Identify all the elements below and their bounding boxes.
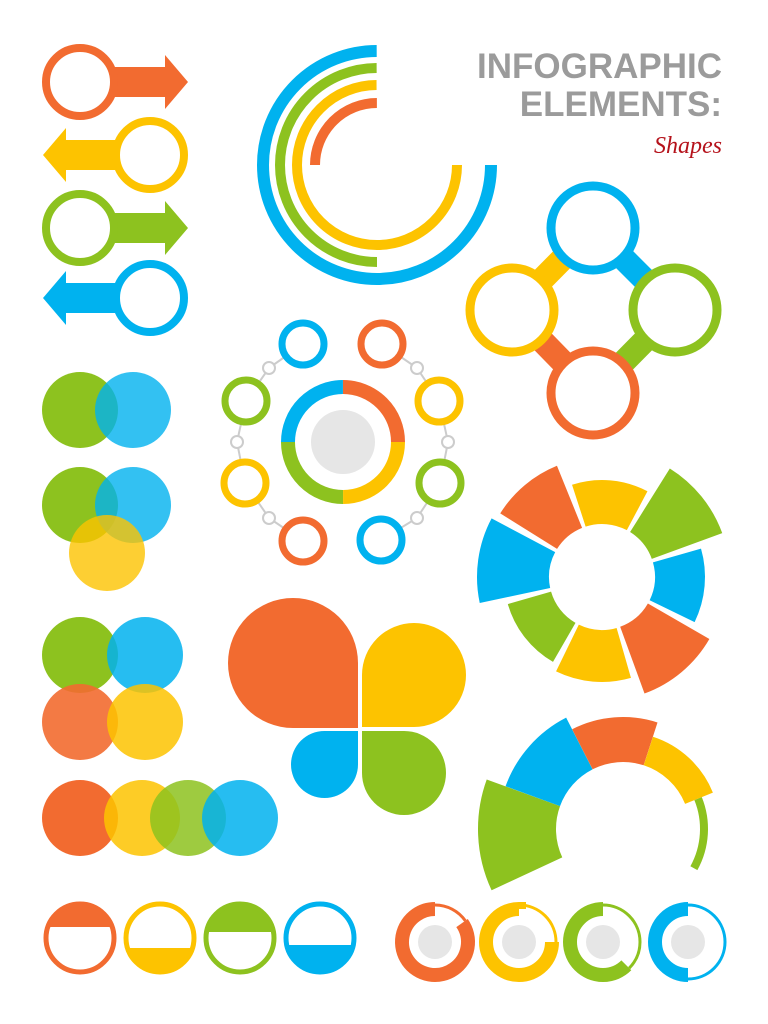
title xyxy=(477,47,722,159)
arrow: orange right xyxy=(46,48,188,116)
arrow: blue left xyxy=(43,264,184,332)
half-filled circles xyxy=(46,904,354,972)
ring cluster xyxy=(224,323,461,562)
title: Shapes xyxy=(654,133,722,159)
arrow: yellow left xyxy=(43,121,184,189)
concentric arcs xyxy=(263,51,491,279)
arrow circles xyxy=(43,48,188,332)
arrow: green right xyxy=(46,194,188,262)
title: INFOGRAPHIC xyxy=(477,47,722,86)
venn row xyxy=(42,780,278,856)
half ring xyxy=(482,688,764,970)
progress rings xyxy=(389,895,725,989)
butterfly petals xyxy=(228,598,466,815)
segmented wheel xyxy=(477,452,727,702)
venn four grid xyxy=(42,617,183,760)
circle network xyxy=(470,186,717,435)
title: ELEMENTS: xyxy=(520,85,722,124)
venn two xyxy=(42,372,171,448)
venn three xyxy=(42,467,171,591)
